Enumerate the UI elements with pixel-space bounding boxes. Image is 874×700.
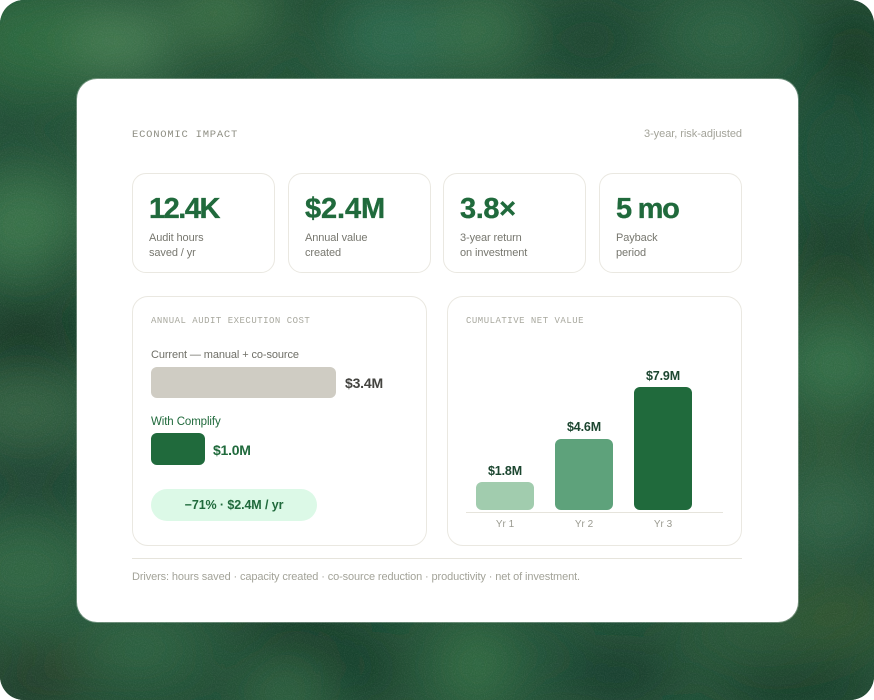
panel heading: CUMULATIVE NET VALUE [466,316,584,326]
bar group: year 1 [476,464,534,530]
axis baseline [466,512,723,513]
bar group: year 2: $4.6M [567,420,601,434]
note: 3-year, risk-adjusted: 3-year, risk-adjusted [644,128,742,140]
label: current: Current — manual + co-source [151,349,299,361]
KPI card: payback period: period [616,246,646,258]
panel: cumulative net value [447,296,742,546]
bar group: year 1: $1.8M [488,464,522,478]
value: $3.4M: $3.4M [345,375,383,391]
bar group: year 3: Yr 3 [654,519,672,530]
panel heading: ANNUAL AUDIT EXECUTION COST [151,316,310,326]
KPI card: audit hours: 12.4K [149,193,219,225]
panel: annual audit execution cost [132,296,427,546]
KPI card: 3-year return: 3-year return [460,232,522,244]
footnote: drivers: Drivers: hours saved · capacity created · co-source reduction · productivity · net of investment. [132,571,580,583]
KPI card: annual value: $2.4M [305,193,385,225]
bar: current cost [151,367,336,398]
bar group: year 1: Yr 1 [496,519,514,530]
KPI card: annual value: Annual value [305,232,367,244]
bar: with Complify cost [151,433,205,465]
value: $1.0M: $1.0M [213,442,251,458]
KPI card: audit hours [132,173,275,273]
KPI card: audit hours: saved / yr [149,246,196,258]
savings pill: −71% · $2.4M / yr [185,498,283,512]
bar group: year 2: Yr 2 [575,519,593,530]
KPI card: audit hours: Audit hours [149,232,204,244]
main white card [77,79,798,622]
savings pill [151,489,317,521]
KPI card: payback period [599,173,742,273]
KPI card: 3-year return: 3.8× [460,193,516,225]
eyebrow heading: economic impact: ECONOMIC IMPACT [132,129,238,141]
bar group: year 3 [634,369,692,530]
bar group: year 3: $7.9M [646,369,680,383]
KPI card: payback period: Payback [616,232,658,244]
KPI card: 3-year return: on investment [460,246,527,258]
KPI card: annual value: created [305,246,341,258]
label: with Complify: With Complify [151,416,221,428]
KPI card: annual value [288,173,431,273]
KPI card: 3-year return [443,173,586,273]
bar group: year 2 [555,420,613,530]
KPI card: payback period: 5 mo [616,193,678,225]
